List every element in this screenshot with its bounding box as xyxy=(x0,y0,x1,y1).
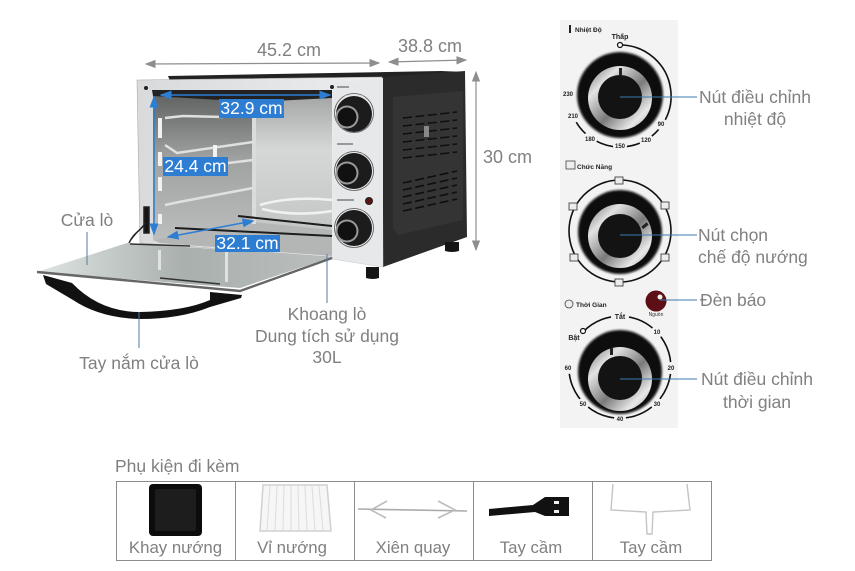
baking tray xyxy=(129,484,222,557)
callout: temperature knob: Nút điều chỉnh xyxy=(699,87,811,107)
timer scale arc xyxy=(569,316,671,418)
basket handle xyxy=(611,484,690,557)
front frame xyxy=(137,77,383,267)
silver ring xyxy=(588,347,652,411)
dimension: 30 cm: 30 cm xyxy=(483,147,532,167)
side sticker xyxy=(424,126,429,137)
oven black side xyxy=(383,71,467,267)
knob cap xyxy=(598,356,642,400)
left wall xyxy=(153,92,253,240)
timer labels: 10 xyxy=(654,330,661,336)
temperature labels: 210 xyxy=(568,114,579,120)
knob body xyxy=(578,330,662,414)
timer labels xyxy=(565,312,675,423)
scale start marker xyxy=(618,42,622,48)
table grid xyxy=(116,481,712,561)
callout: temperature knob xyxy=(620,87,811,129)
temperature labels: Thấp xyxy=(612,33,628,41)
gaps around numbers xyxy=(562,308,677,425)
callout: handle: Tay nắm cửa lò xyxy=(79,352,199,373)
function icons xyxy=(569,177,669,286)
heading: Thời Gian xyxy=(565,300,607,309)
back wall xyxy=(252,96,332,230)
inner height arrow and label: 24.4 cm xyxy=(164,156,227,176)
oven cavity xyxy=(152,90,332,256)
silver ring xyxy=(588,66,652,130)
pointer xyxy=(619,68,622,75)
indicator lamp xyxy=(646,290,666,318)
panel mini labels xyxy=(337,86,354,201)
callout: timer knob xyxy=(620,369,813,412)
dimension: 38.8 cm: 38.8 cm xyxy=(398,36,462,56)
back wall highlight xyxy=(260,199,332,214)
callout: handle xyxy=(79,312,199,373)
ceiling xyxy=(152,90,332,102)
callout: door xyxy=(61,210,113,265)
inner height arrow and label xyxy=(154,97,228,234)
pointer xyxy=(641,222,649,229)
frame screws xyxy=(144,85,334,90)
inner depth arrow and label xyxy=(168,221,280,253)
function scale arc xyxy=(569,180,671,282)
temperature labels: 230 xyxy=(563,92,574,98)
baking tray: Khay nướng xyxy=(129,538,222,557)
inner width arrow and label xyxy=(161,95,330,118)
callout: timer knob: thời gian xyxy=(723,392,791,412)
callout: timer knob: Nút điều chỉnh xyxy=(701,369,813,389)
oven feet xyxy=(366,242,459,279)
callout: lamp: Đèn báo xyxy=(700,290,766,310)
callout: mode knob: Nút chọn xyxy=(698,225,768,245)
oven knob 1 xyxy=(334,94,374,132)
knob cap xyxy=(598,214,642,258)
heading: Chức Năng xyxy=(566,161,612,171)
callout: mode knob: chế độ nướng xyxy=(698,247,808,267)
silver ring xyxy=(588,204,652,268)
basket handle: Tay cầm xyxy=(620,538,682,557)
oven indicator light xyxy=(366,198,372,204)
timer labels: Bật xyxy=(568,335,580,342)
inner width arrow and label: 32.9 cm xyxy=(220,98,283,118)
temperature scale arc xyxy=(572,45,671,147)
wire rack xyxy=(257,485,331,557)
knob body xyxy=(578,190,662,274)
knob body xyxy=(577,52,663,138)
heading: Chức Năng: Chức Năng xyxy=(577,164,612,171)
callout: cavity: 30L xyxy=(312,347,342,367)
oven knob 3 xyxy=(334,208,374,248)
panel: control close-up xyxy=(560,20,678,428)
heading: Nhiệt Độ xyxy=(569,25,602,34)
dial: temperature xyxy=(563,33,671,153)
dimension: 38.8 cm xyxy=(389,36,466,62)
dial: timer xyxy=(562,308,677,425)
accessories table xyxy=(116,481,712,561)
door glass xyxy=(37,243,332,288)
timer labels: Tắt xyxy=(615,312,626,321)
callout: door: Cửa lò xyxy=(61,210,113,230)
pointer xyxy=(610,348,613,355)
callout: cavity xyxy=(255,254,399,367)
inner depth arrow and label: 32.1 cm xyxy=(216,233,279,253)
side vents xyxy=(403,112,457,211)
callout: cavity: Dung tích sử dụng xyxy=(255,326,399,346)
cavity floor xyxy=(153,222,332,256)
gaps around numbers xyxy=(566,109,667,153)
temperature labels: 150 xyxy=(615,144,626,150)
knob cap xyxy=(598,75,642,119)
left hinge xyxy=(129,207,149,243)
side slots xyxy=(158,118,217,224)
dimension: 45.2 cm: 45.2 cm xyxy=(257,40,321,60)
wire rack: Vỉ nướng xyxy=(257,538,327,557)
rotisserie skewer xyxy=(358,501,467,557)
tray handle xyxy=(489,497,569,557)
temperature labels: 120 xyxy=(641,138,652,144)
timer labels: 20 xyxy=(668,366,675,372)
callout: cavity: Khoang lò xyxy=(288,304,366,324)
rack rails xyxy=(165,116,253,205)
left wall light edge xyxy=(252,102,256,224)
timer labels: 40 xyxy=(617,417,624,423)
oven xyxy=(37,71,467,319)
callout: lamp xyxy=(660,290,766,310)
oven knob 2 xyxy=(334,152,374,190)
temperature labels: 90 xyxy=(658,122,665,128)
callout: temperature knob: nhiệt độ xyxy=(724,109,786,129)
marker xyxy=(580,328,586,334)
heading: Nhiệt Độ: Nhiệt Độ xyxy=(575,27,602,34)
temperature labels: 180 xyxy=(585,137,596,143)
side embossed panel xyxy=(393,91,463,235)
door edge xyxy=(37,258,332,291)
door inner dark bar xyxy=(130,244,220,284)
door handle xyxy=(43,275,242,319)
tray handle: Tay cầm xyxy=(500,538,562,557)
indicator lamp: Nguồn xyxy=(649,312,664,318)
door reflections xyxy=(158,250,228,282)
timer labels: 50 xyxy=(580,402,587,408)
heading: Thời Gian: Thời Gian xyxy=(576,302,607,309)
rotisserie skewer: Xiên quay xyxy=(376,538,451,557)
timer labels: 30 xyxy=(654,402,661,408)
dial: function xyxy=(569,177,671,286)
rack bars xyxy=(175,216,332,236)
accessories heading: Phụ kiện đi kèm xyxy=(115,456,240,476)
temperature labels xyxy=(563,33,665,150)
panel background xyxy=(560,20,678,428)
timer labels: 60 xyxy=(565,366,572,372)
control panel xyxy=(333,78,383,267)
callout: mode knob xyxy=(620,225,808,267)
oven top xyxy=(168,71,465,81)
